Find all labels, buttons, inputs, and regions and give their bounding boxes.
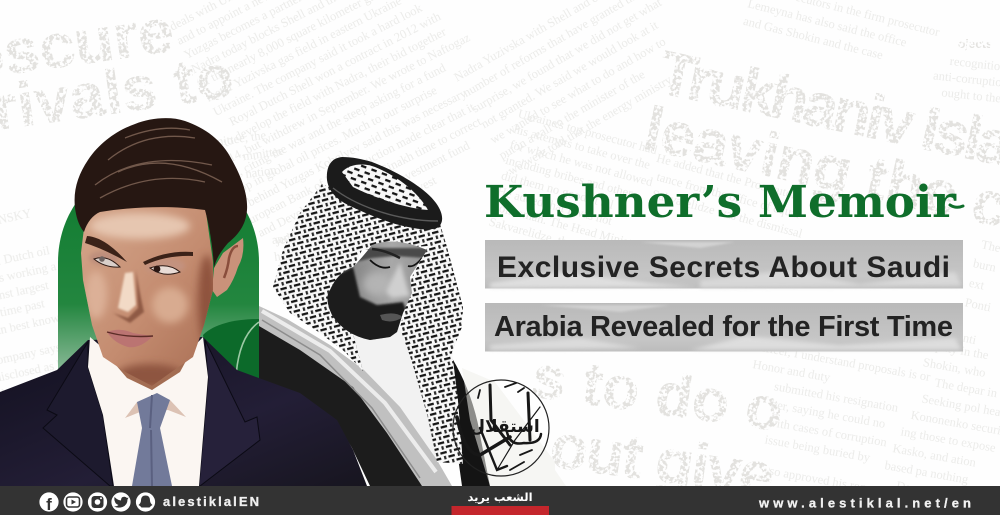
small newspaper text columns: ext	[968, 276, 986, 293]
lips	[380, 313, 403, 321]
green arch behind portrait	[58, 160, 259, 400]
website URL: www.alestiklal.net/en	[758, 496, 971, 510]
social icons	[39, 492, 155, 514]
beard	[327, 266, 406, 340]
agal highlight	[333, 188, 438, 221]
eyebrow	[372, 249, 400, 258]
small newspaper text columns: to develop the field with Nadra, their bid together	[221, 24, 449, 150]
right side cloak	[450, 358, 490, 486]
small newspaper text columns: based pa nothing	[884, 458, 970, 487]
collar shadow	[125, 400, 186, 418]
small newspaper text columns: human	[273, 245, 310, 264]
lip line	[107, 332, 153, 336]
small newspaper text columns: Honor and duty	[752, 357, 832, 385]
small newspaper text columns: including bribes and other	[504, 153, 635, 200]
right iris	[154, 266, 160, 272]
small newspaper text columns: supply approve	[11, 438, 90, 468]
title flourish	[950, 205, 963, 207]
small newspaper text columns: with cases of corruption	[767, 415, 889, 450]
nose highlight	[118, 272, 136, 312]
calligraphy wordmark: استقلال	[470, 417, 540, 437]
seal ring	[453, 380, 549, 476]
small newspaper text columns: man behind Yuzgas Kobolyev said this was necessary	[223, 86, 469, 220]
small newspaper text columns: 2015, citing the war and the steep asking for a fund	[213, 60, 449, 190]
small newspaper text columns: Ukraine	[276, 261, 318, 281]
left eye	[94, 258, 120, 267]
small newspaper text columns: an Kuzakh through the invest	[301, 173, 439, 252]
small newspaper text columns: officer, I understand proposals is or	[755, 339, 932, 384]
closed eyes	[370, 258, 422, 268]
small newspaper text columns: so approved his request	[768, 464, 887, 498]
logo: alestiklal calligraphy seal	[453, 368, 566, 486]
keffiyeh dome	[342, 164, 428, 210]
left lapel	[43, 342, 113, 486]
icon: facebook: f	[46, 495, 52, 514]
icon: youtube	[63, 492, 83, 512]
keffiyeh head cloth	[273, 184, 463, 464]
right cheek light	[152, 287, 188, 323]
suit jacket	[0, 337, 367, 486]
small newspaper text columns: submitted his resignation	[773, 379, 900, 415]
small newspaper text columns: his attempts to take over the	[512, 122, 652, 172]
small newspaper text columns: we were told that the energy ministry	[506, 72, 675, 178]
small newspaper text columns: European Bank of Reconstruction made clear that it	[239, 100, 477, 230]
ear	[212, 238, 243, 297]
torn newspaper scrap	[462, 368, 566, 486]
ear inner	[224, 246, 238, 278]
icon: twitter	[111, 492, 131, 512]
small newspaper text columns: Royal Dutch Shell won a contract in 2012 with	[227, 9, 444, 129]
small newspaper text columns: ber, saying he could no	[770, 397, 886, 431]
footer bar	[0, 486, 1000, 515]
small newspaper text columns: mittee, the	[213, 128, 267, 149]
white thobe	[345, 328, 450, 486]
small newspaper text columns: is somehow best	[4, 404, 88, 435]
face	[327, 242, 427, 340]
paper wrinkles	[490, 242, 962, 288]
left cheek highlight	[85, 271, 107, 319]
right lapel	[199, 340, 260, 486]
right eye socket	[149, 259, 184, 271]
red tab	[452, 506, 549, 515]
cheek light	[363, 272, 393, 296]
forehead shadow	[356, 248, 430, 262]
subtitle strip 2: Arabia Revealed for the First Time	[494, 311, 953, 343]
small newspaper text columns: Kiev, the country	[1, 386, 89, 418]
small newspaper text columns: ing those to expose	[900, 424, 997, 455]
dark green swoosh inside arch	[203, 319, 259, 385]
forehead highlight	[90, 213, 190, 239]
small newspaper text columns: He added that the Prosecutor	[655, 151, 799, 202]
small newspaper text columns: burn	[972, 256, 998, 275]
small newspaper text columns: Shokin, who	[922, 355, 987, 380]
small newspaper text columns: and Gas Shokin and the case	[742, 14, 885, 62]
large headline fragments: out give	[546, 412, 778, 511]
small newspaper text columns: for which he was not allowed	[508, 137, 655, 189]
left iris	[99, 256, 105, 262]
small newspaper text columns: we wanted to see what to do and how to	[488, 34, 668, 147]
subtitle strip 2	[485, 303, 963, 352]
small newspaper text columns: Ukraine. The company said it took a hard look	[211, 0, 425, 119]
small newspaper text columns: and	[271, 230, 291, 247]
icon: snapchat	[136, 492, 155, 512]
small newspaper text columns: Sakvarelidze was the dismissal	[650, 187, 804, 241]
hair	[75, 118, 247, 268]
icon: instagram	[88, 492, 107, 512]
small newspaper text columns: the drop in global oil prices. Much to our surprise	[211, 83, 440, 208]
small newspaper text columns: Ukraine of Canal	[8, 420, 95, 451]
small newspaper text columns: did them no good at all	[500, 168, 616, 212]
small newspaper text columns: issue being buried by	[764, 432, 872, 465]
small newspaper text columns: put in a call to the minister of the	[497, 67, 648, 162]
right eyebrow	[143, 252, 193, 265]
small newspaper text columns: anti	[956, 330, 978, 347]
small newspaper text columns: and Development. Ukraine Sinakh time to correct	[255, 114, 484, 240]
small newspaper text columns: ought to the	[941, 85, 1000, 105]
nose	[386, 262, 410, 298]
small newspaper text columns: tance from the office of equal	[655, 170, 802, 222]
small newspaper text columns: nation	[244, 163, 278, 181]
subtitle strip 1: Exclusive Secrets About Saudi	[497, 251, 950, 284]
small newspaper text columns: policeman. The Head Minister	[492, 199, 643, 252]
portrait: man in suit	[0, 118, 367, 486]
small newspaper text columns: Demchy ation	[895, 478, 968, 505]
black bisht cloak	[259, 325, 425, 486]
white shirt	[88, 337, 208, 486]
mouth	[107, 330, 153, 347]
nose shadow	[113, 270, 144, 323]
small newspaper text columns: Ukraine's top prosecutor had	[516, 107, 659, 157]
right eye	[150, 266, 180, 274]
left eyebrow	[85, 236, 127, 262]
small newspaper text columns: Deputy in the	[920, 337, 990, 362]
neck	[103, 335, 200, 390]
embroidered robe trim	[259, 306, 452, 486]
small newspaper text columns: He added that I was not	[496, 184, 614, 228]
subtitle strip 1	[485, 240, 963, 288]
small newspaper text columns: Kasko, and ation	[892, 441, 978, 470]
small newspaper text columns: Jerzy Jaroslaw through the investment fund	[272, 138, 473, 249]
small newspaper text columns: mmittee	[242, 144, 285, 163]
title: Kushner’s Memoir	[484, 177, 957, 228]
small newspaper text columns: Sakvarelidze, the Georgian born	[487, 215, 648, 270]
large headline fragments: ojects	[958, 37, 993, 51]
trim highlights	[262, 311, 436, 478]
chin shadow	[116, 364, 184, 388]
necktie	[132, 393, 172, 486]
left eye socket	[89, 251, 119, 265]
small newspaper text columns: Ponti	[964, 295, 993, 315]
hair highlights	[95, 128, 222, 198]
calligraphy strokes	[457, 383, 541, 470]
social handle: alestiklalEN	[163, 494, 259, 509]
right jaw shadow	[198, 255, 216, 345]
portrait: man in keffiyeh	[259, 157, 490, 486]
head rope agal	[327, 157, 442, 230]
Arabic slogan: الشعب يريد	[467, 490, 533, 504]
small newspaper text columns: 2014, but withdrew in September. We wrote to Naftogaz	[215, 30, 473, 171]
paper wrinkles	[490, 305, 962, 350]
large headline fragments: s to do o	[528, 343, 787, 444]
small newspaper text columns: not granted. We said we would look at it	[479, 18, 661, 131]
face	[81, 207, 213, 386]
